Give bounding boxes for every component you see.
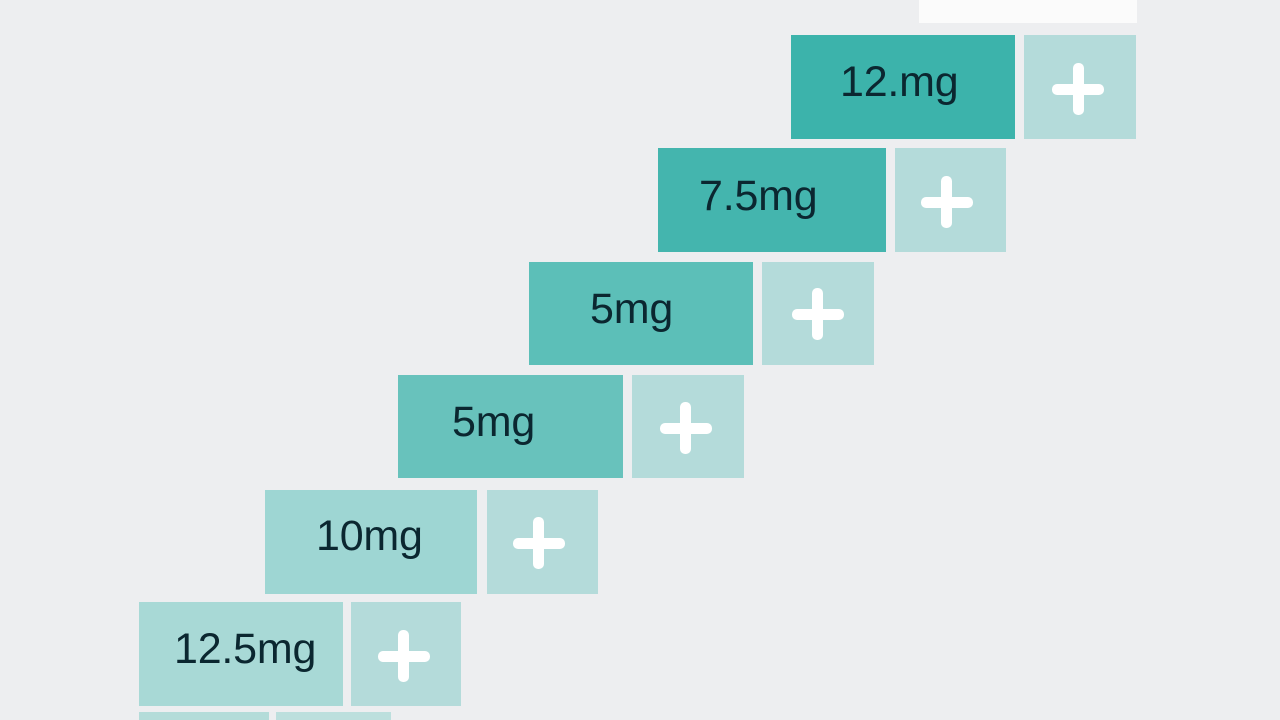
step: 12.mg [791,35,1136,139]
step: 7.5mg [658,148,1006,252]
dose bar: 7.5mg: 7.5mg [699,172,818,220]
icon: plus [762,262,874,365]
icon: plus [632,375,744,478]
partial plus box [276,712,391,720]
dose bar: 5mg: 5mg [590,285,673,333]
dose bar: 5mg [398,375,623,478]
dose bar: 12.5mg: 12.5mg [174,625,316,673]
partial dose bar [139,712,269,720]
step: 5mg lower [398,375,744,478]
step: 5mg upper [529,262,874,365]
dose bar: 7.5mg [658,148,886,252]
dose bar: 5mg: 5mg [452,398,535,446]
step: 10mg [265,490,598,594]
dose bar: 10mg [265,490,477,594]
partial step cut off at bottom [139,712,391,720]
icon: plus [351,602,461,706]
icon: plus [1024,35,1136,139]
dose bar: 12.mg [791,35,1015,139]
icon: plus [487,490,598,594]
dose bar: 12.5mg [139,602,343,706]
dose bar: 5mg [529,262,753,365]
icon: plus [895,148,1006,252]
dose bar: 10mg: 10mg [316,512,423,560]
step: 12.5mg [139,602,461,706]
dose bar: 12.mg: 12.mg [840,58,959,106]
white box at top [919,0,1137,23]
